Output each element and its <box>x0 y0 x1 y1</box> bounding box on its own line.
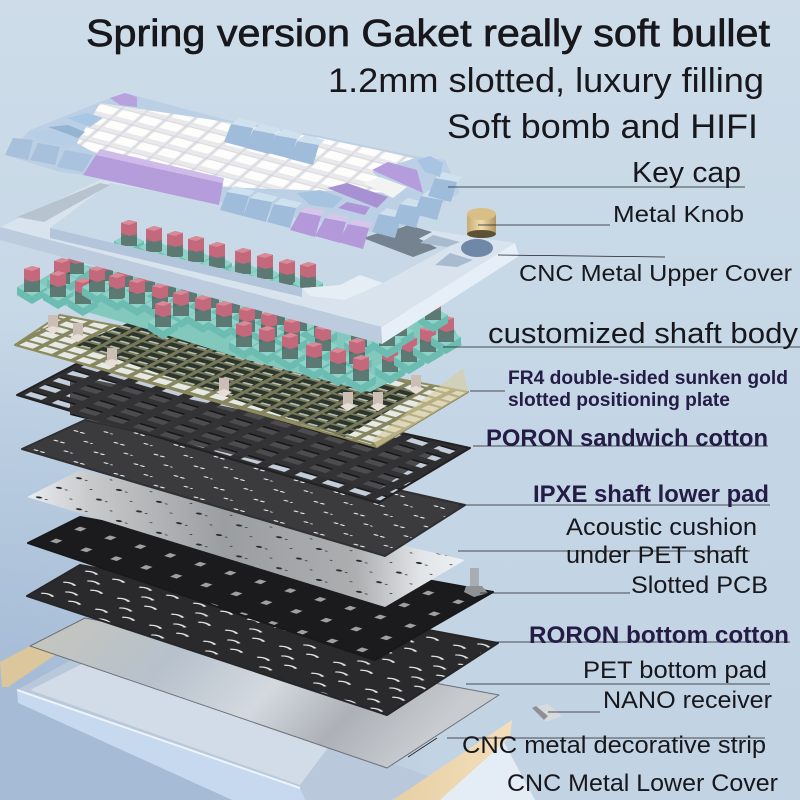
right cluster keys <box>297 156 463 238</box>
front blue keys <box>220 186 302 228</box>
stabilizer posts <box>45 315 424 411</box>
label: RORON: RORON bottom cotton <box>529 622 789 649</box>
label: FR4 plate line 2: slotted positioning plate <box>508 390 730 411</box>
left decorative strip <box>0 620 180 687</box>
label: FR4 plate: FR4 double-sided sunken gold <box>508 368 788 389</box>
leader lines <box>408 187 800 757</box>
label: upper cover: CNC Metal Upper Cover <box>519 260 792 286</box>
PET bottom pad <box>30 618 499 768</box>
metal knob <box>467 208 496 238</box>
purple top key <box>110 93 137 107</box>
label: slotted PCB: Slotted PCB <box>631 572 768 599</box>
slotted PCB <box>27 565 498 715</box>
label: PET bottom pad: PET bottom pad <box>583 657 767 684</box>
front purple keys <box>290 207 373 249</box>
blue top row keys <box>224 118 325 165</box>
label: acoustic cushion: Acoustic cushion <box>566 514 757 541</box>
label: PORON: PORON sandwich cotton <box>486 425 768 452</box>
right decorative strip <box>393 720 512 800</box>
lower case <box>0 655 535 800</box>
title: Spring version Gaket really soft bullet <box>86 13 770 55</box>
label: lower cover: CNC Metal Lower Cover <box>507 770 778 797</box>
IPXE shaft lower pad <box>22 420 465 556</box>
CNC metal upper cover frame <box>0 180 519 344</box>
purple space bar <box>83 149 224 205</box>
left blue keys <box>5 113 103 172</box>
label: key cap: Key cap <box>632 157 741 189</box>
customized shaft switches <box>17 220 461 393</box>
acoustic cushion black plate <box>28 517 493 660</box>
nano receiver <box>532 704 562 722</box>
label: decorative strip: CNC metal decorative strip <box>462 732 766 759</box>
subtitle line 1: 1.2mm slotted, luxury filling <box>328 62 764 100</box>
label: IPXE: IPXE shaft lower pad <box>533 481 769 508</box>
teal switch underlay <box>20 262 462 392</box>
key caps <box>5 93 463 249</box>
label: metal knob: Metal Knob <box>613 201 744 227</box>
PORON sandwich cotton frame <box>17 362 470 503</box>
PCB connector <box>464 568 488 597</box>
acoustic cushion under PET shaft <box>27 470 465 607</box>
label: NANO receiver: NANO receiver <box>603 687 772 714</box>
subtitle line 2: Soft bomb and HIFI <box>447 108 758 146</box>
label: shaft body: customized shaft body <box>488 318 799 350</box>
label: under PET shaft: under PET shaft <box>566 542 748 569</box>
FR4 positioning plate <box>15 315 468 447</box>
